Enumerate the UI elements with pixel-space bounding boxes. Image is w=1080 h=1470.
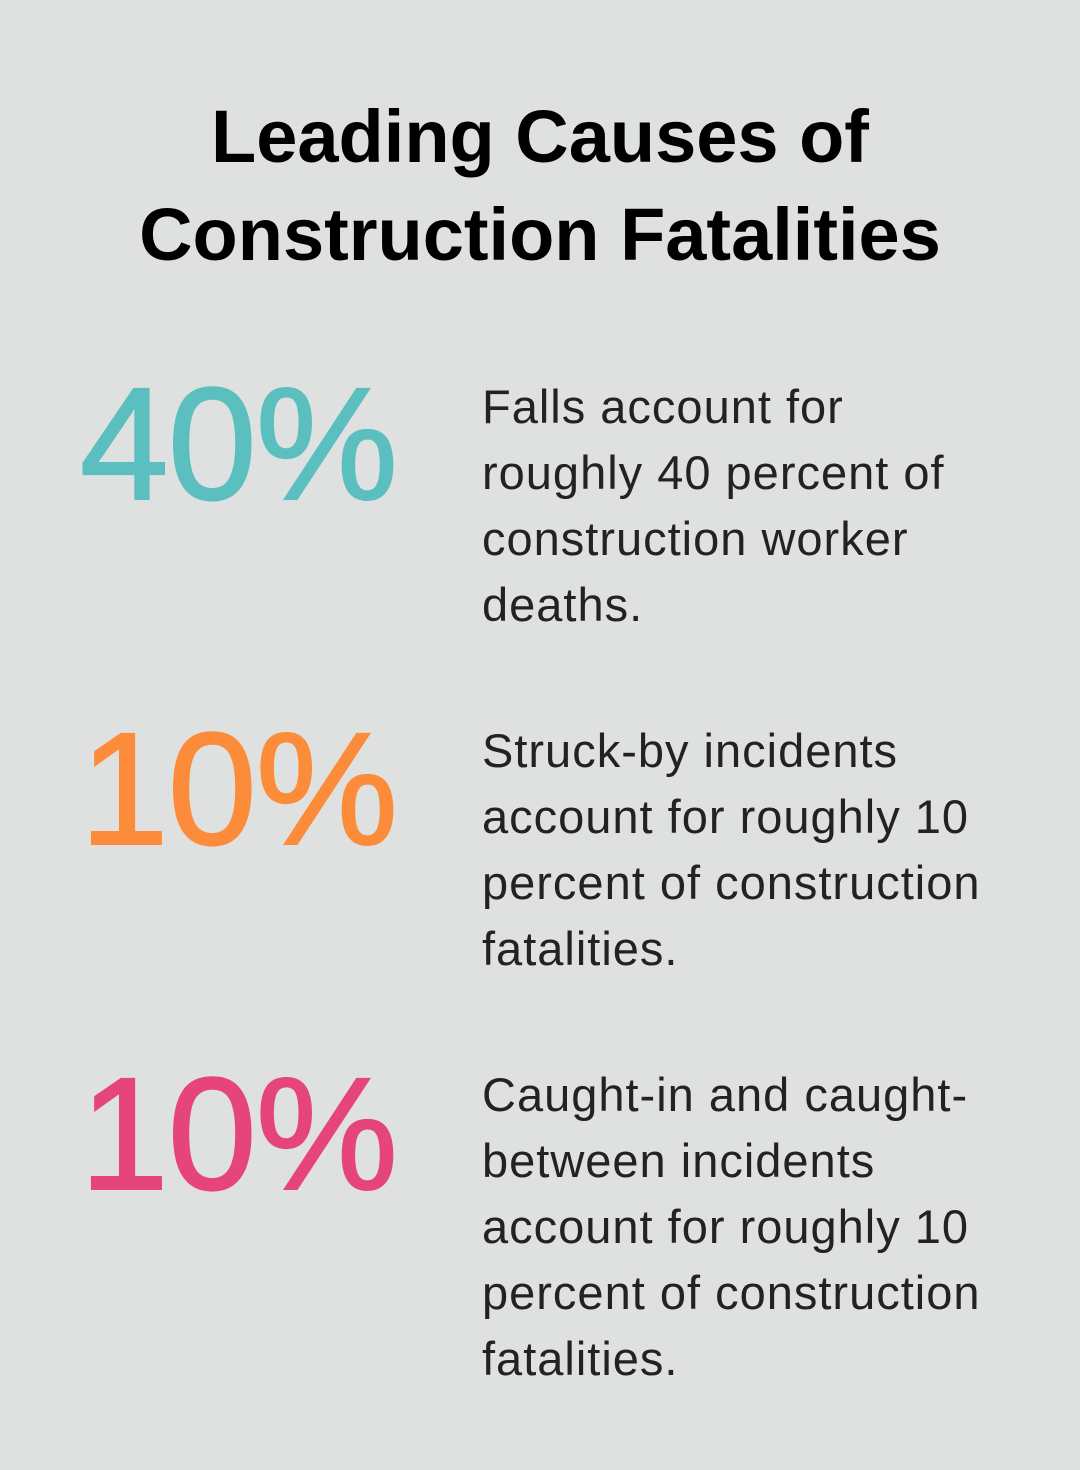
text: struck-by: fatalities. <box>482 922 678 975</box>
text: falls <box>482 380 945 631</box>
text: struck-by: Struck-by incidents <box>482 724 898 777</box>
stat: 10% struck-by: 10% <box>80 699 397 878</box>
text: falls: deaths. <box>482 578 643 631</box>
text: caught-in: percent of construction <box>482 1266 980 1319</box>
title <box>139 95 941 276</box>
text: caught-in: between incidents <box>482 1134 875 1187</box>
text: caught-in <box>482 1068 980 1385</box>
stat: 10% caught-in: 10% <box>80 1044 397 1223</box>
text: caught-in: Caught-in and caught- <box>482 1068 968 1121</box>
text: struck-by <box>482 724 980 975</box>
text: falls: roughly 40 percent of <box>482 446 945 499</box>
stat: 40%: 40% <box>80 354 397 533</box>
text: caught-in: fatalities. <box>482 1332 678 1385</box>
text: caught-in: account for roughly 10 <box>482 1200 969 1253</box>
text: falls: construction worker <box>482 512 908 565</box>
text: struck-by: percent of construction <box>482 856 980 909</box>
text: struck-by: account for roughly 10 <box>482 790 969 843</box>
text: falls: Falls account for <box>482 380 844 433</box>
title: Construction Fatalities <box>139 193 941 276</box>
title: Leading Causes of <box>211 95 869 178</box>
